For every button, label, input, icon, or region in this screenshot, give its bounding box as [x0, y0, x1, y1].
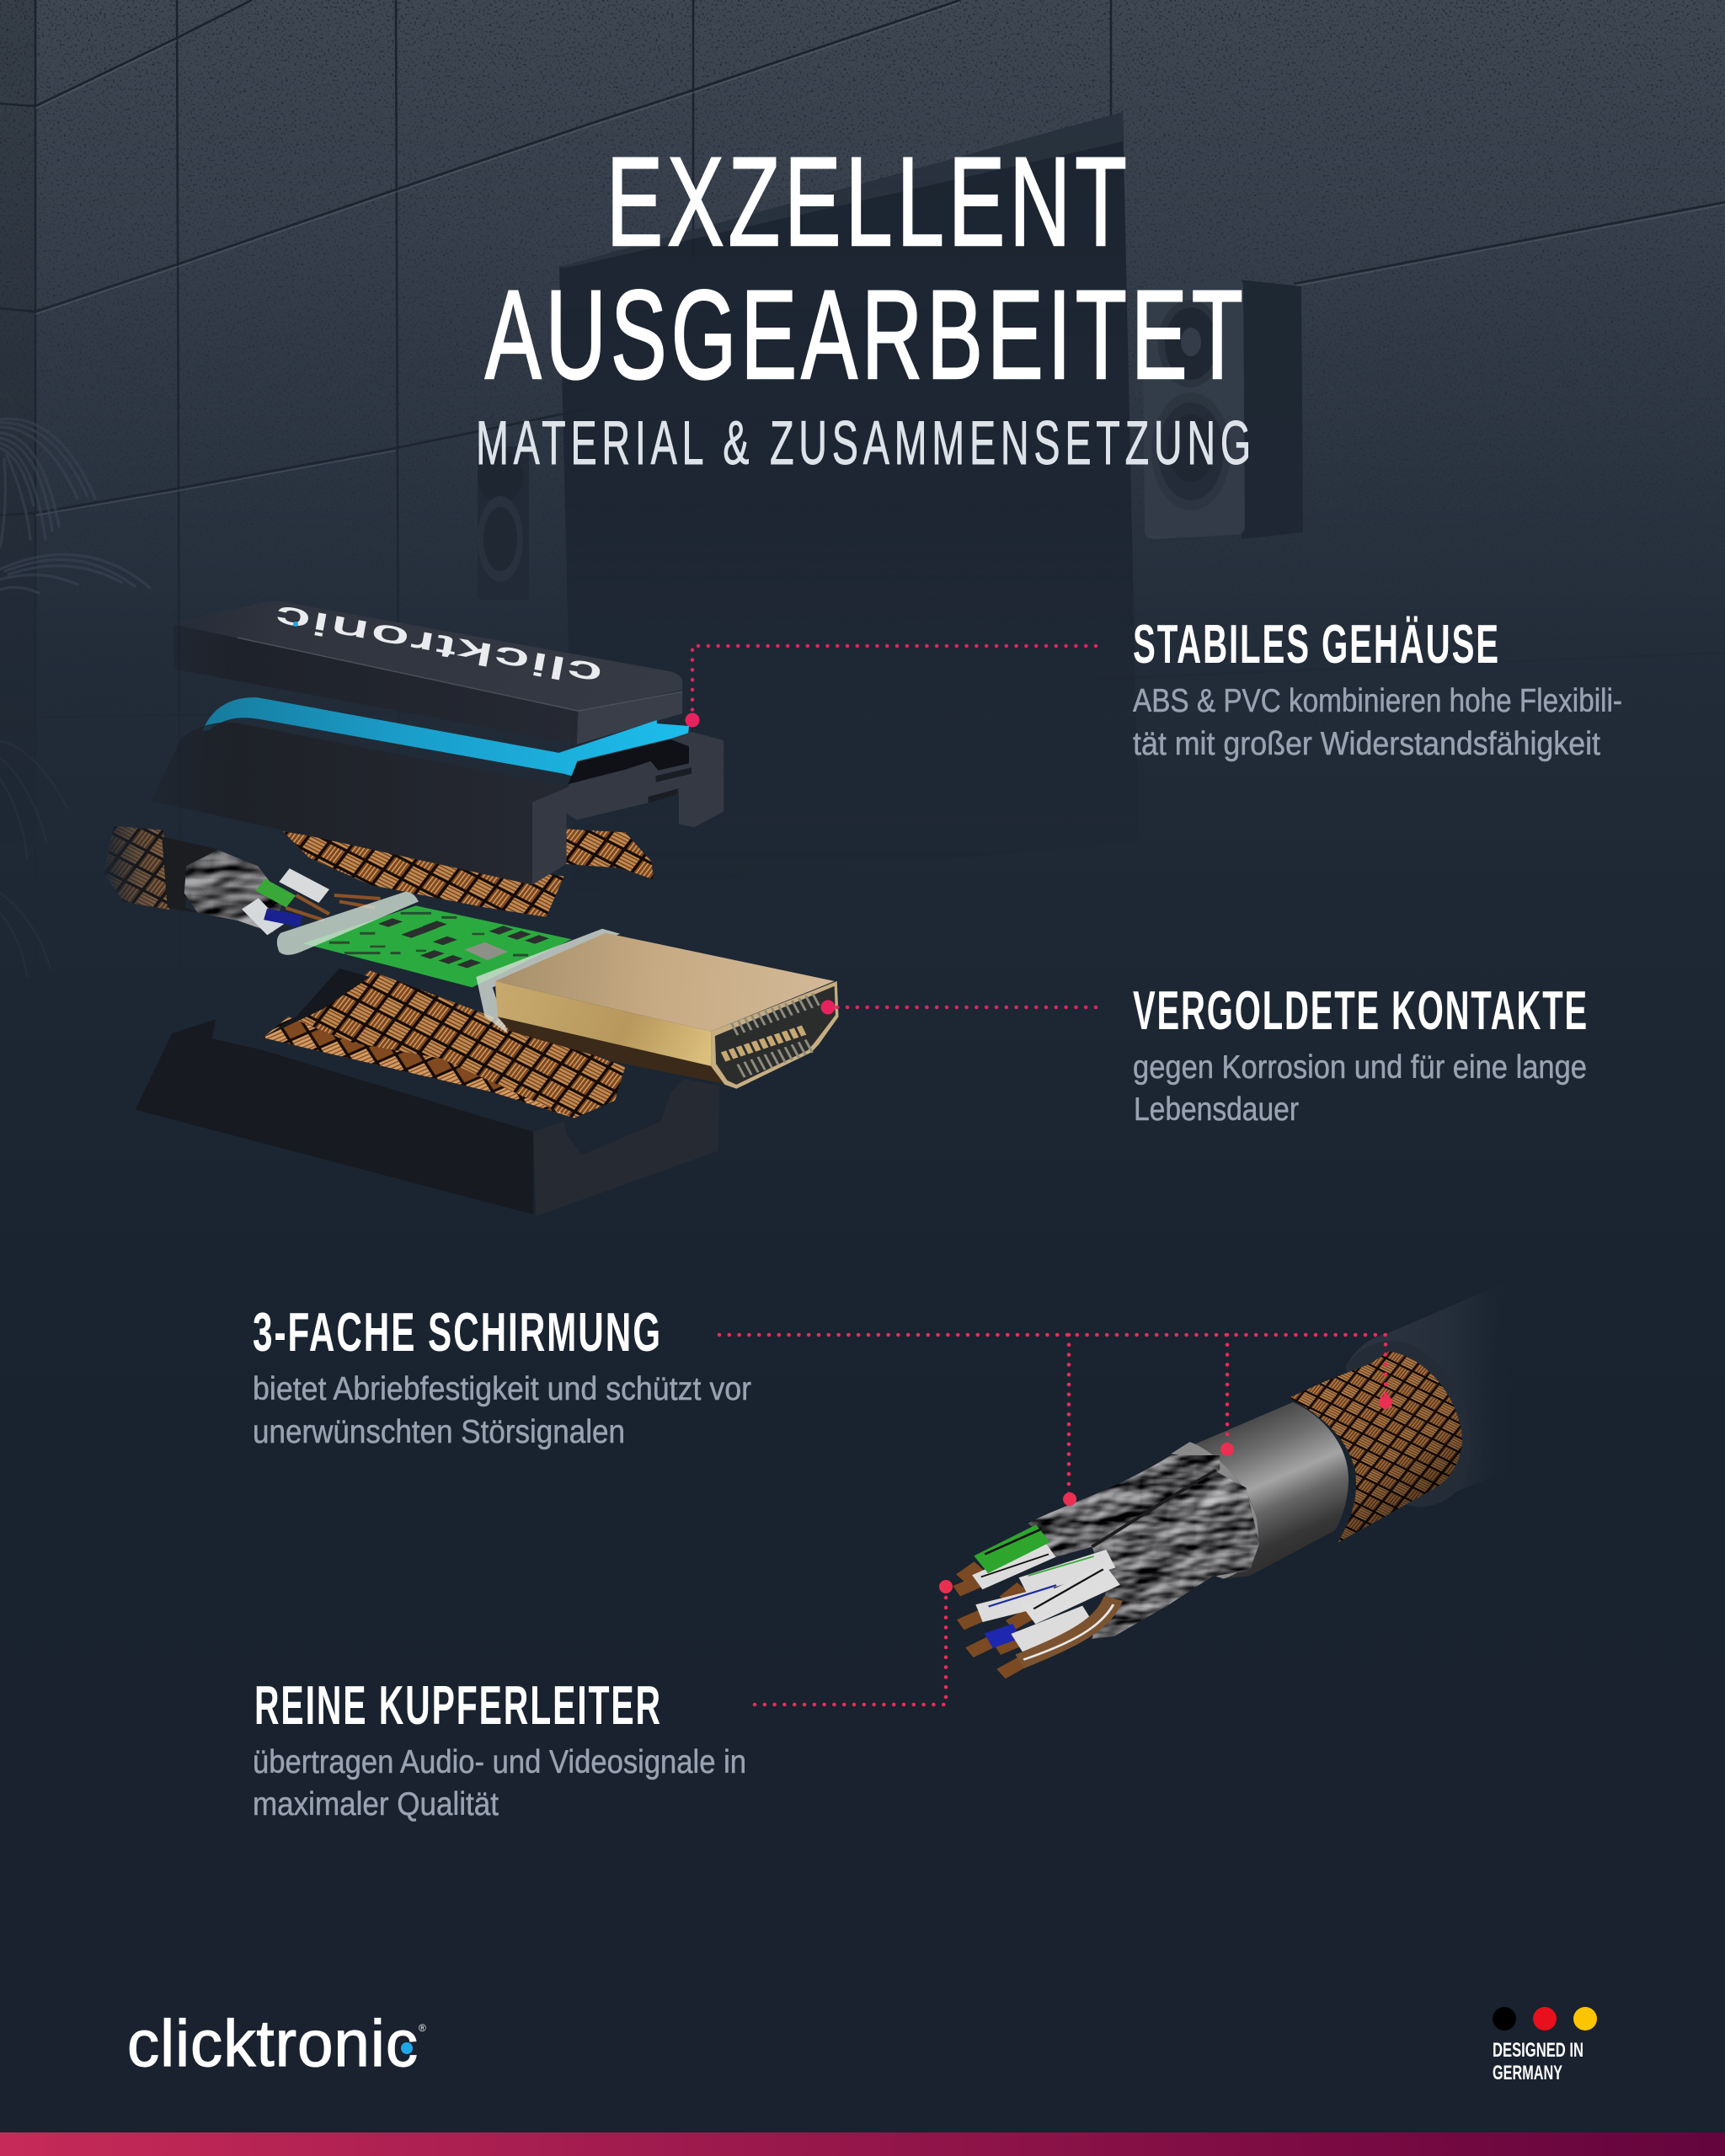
- description: ABS & PVC kombinieren hohe Flexibili-: [1133, 683, 1622, 719]
- description: unerwünschten Störsignalen: [253, 1414, 625, 1450]
- title: AUSGEARBEITET: [485, 264, 1247, 405]
- background: concrete wall with panels: [0, 0, 1725, 645]
- callout: Stabiles Gehäuse: [686, 613, 1622, 762]
- callout: 3-fache Schirmung: [253, 1301, 1392, 1506]
- callout: Reine Kupferleiter: [253, 1580, 953, 1822]
- callout: Vergoldete Kontakte: [820, 979, 1589, 1128]
- description: maximaler Qualität: [253, 1786, 499, 1822]
- copper braid shield: [1290, 1352, 1462, 1542]
- badge: designed in Germany: GERMANY: [1493, 2062, 1562, 2084]
- connector brand lettering: clicktronic: [270, 599, 604, 692]
- logo: clicktronic: clicktronic: [127, 2006, 419, 2080]
- badge: designed in Germany: DESIGNED IN: [1493, 2039, 1583, 2062]
- subtitle: MATERIAL & ZUSAMMENSETZUNG: [476, 409, 1256, 478]
- metal foil tube: [1152, 1402, 1348, 1579]
- heading: STABILES GEHÄUSE: [1133, 613, 1500, 675]
- leader line: [755, 1580, 953, 1705]
- bottom colour bar: [0, 2132, 1725, 2156]
- plant shadows: [0, 419, 150, 977]
- lower braid: [263, 971, 625, 1118]
- logo: clicktronic: ®: [419, 2022, 426, 2034]
- outer sheath: [1346, 1278, 1516, 1507]
- leader lines: [719, 1335, 1392, 1506]
- heading: REINE KUPFERLEITER: [254, 1674, 662, 1736]
- leader line: [820, 1001, 1096, 1014]
- upper shell cap: [174, 601, 682, 744]
- description: bietet Abriebfestigkeit und schützt vor: [253, 1371, 751, 1407]
- badge: designed in Germany: [1493, 2007, 1597, 2084]
- description: [253, 1371, 751, 1450]
- description: [1133, 683, 1622, 762]
- leader line: [686, 646, 1096, 728]
- coloured conductors with copper tips: [957, 1529, 1114, 1673]
- description: [253, 1744, 746, 1822]
- title: EXZELLENT: [606, 131, 1131, 272]
- description: übertragen Audio- und Videosignale in: [253, 1744, 746, 1780]
- blue inner frame: [203, 697, 689, 778]
- connector brand lettering: [270, 599, 604, 692]
- background: right speaker: [1142, 279, 1303, 539]
- connector illustration: exploded HDMI plug: [104, 601, 839, 1216]
- cable illustration: cut-away HDMI cable: [957, 1278, 1516, 1673]
- green circuit board: [302, 905, 572, 987]
- description: [1133, 1049, 1587, 1128]
- small inner wires: [250, 875, 380, 930]
- gold HDMI plug: [495, 933, 839, 1089]
- title: [485, 131, 1247, 405]
- description: gegen Korrosion und für eine lange: [1133, 1049, 1587, 1086]
- background: left speaker: [478, 446, 529, 600]
- translucent clamp left: [277, 892, 419, 955]
- lower shell: [136, 969, 719, 1216]
- heading: 3-FACHE SCHIRMUNG: [253, 1301, 662, 1363]
- crumpled foil around wire pairs: [1028, 1455, 1259, 1639]
- description: Lebensdauer: [1134, 1091, 1299, 1128]
- left cable stub: braid, sheath and foil: [104, 826, 283, 933]
- lower part of the top shell: [151, 723, 724, 885]
- translucent clamp at plug: [476, 929, 620, 1033]
- background: dark display panel: [559, 112, 1134, 614]
- description: tät mit großer Widerstandsfähigkeit: [1133, 726, 1600, 762]
- upper braid: [283, 829, 654, 917]
